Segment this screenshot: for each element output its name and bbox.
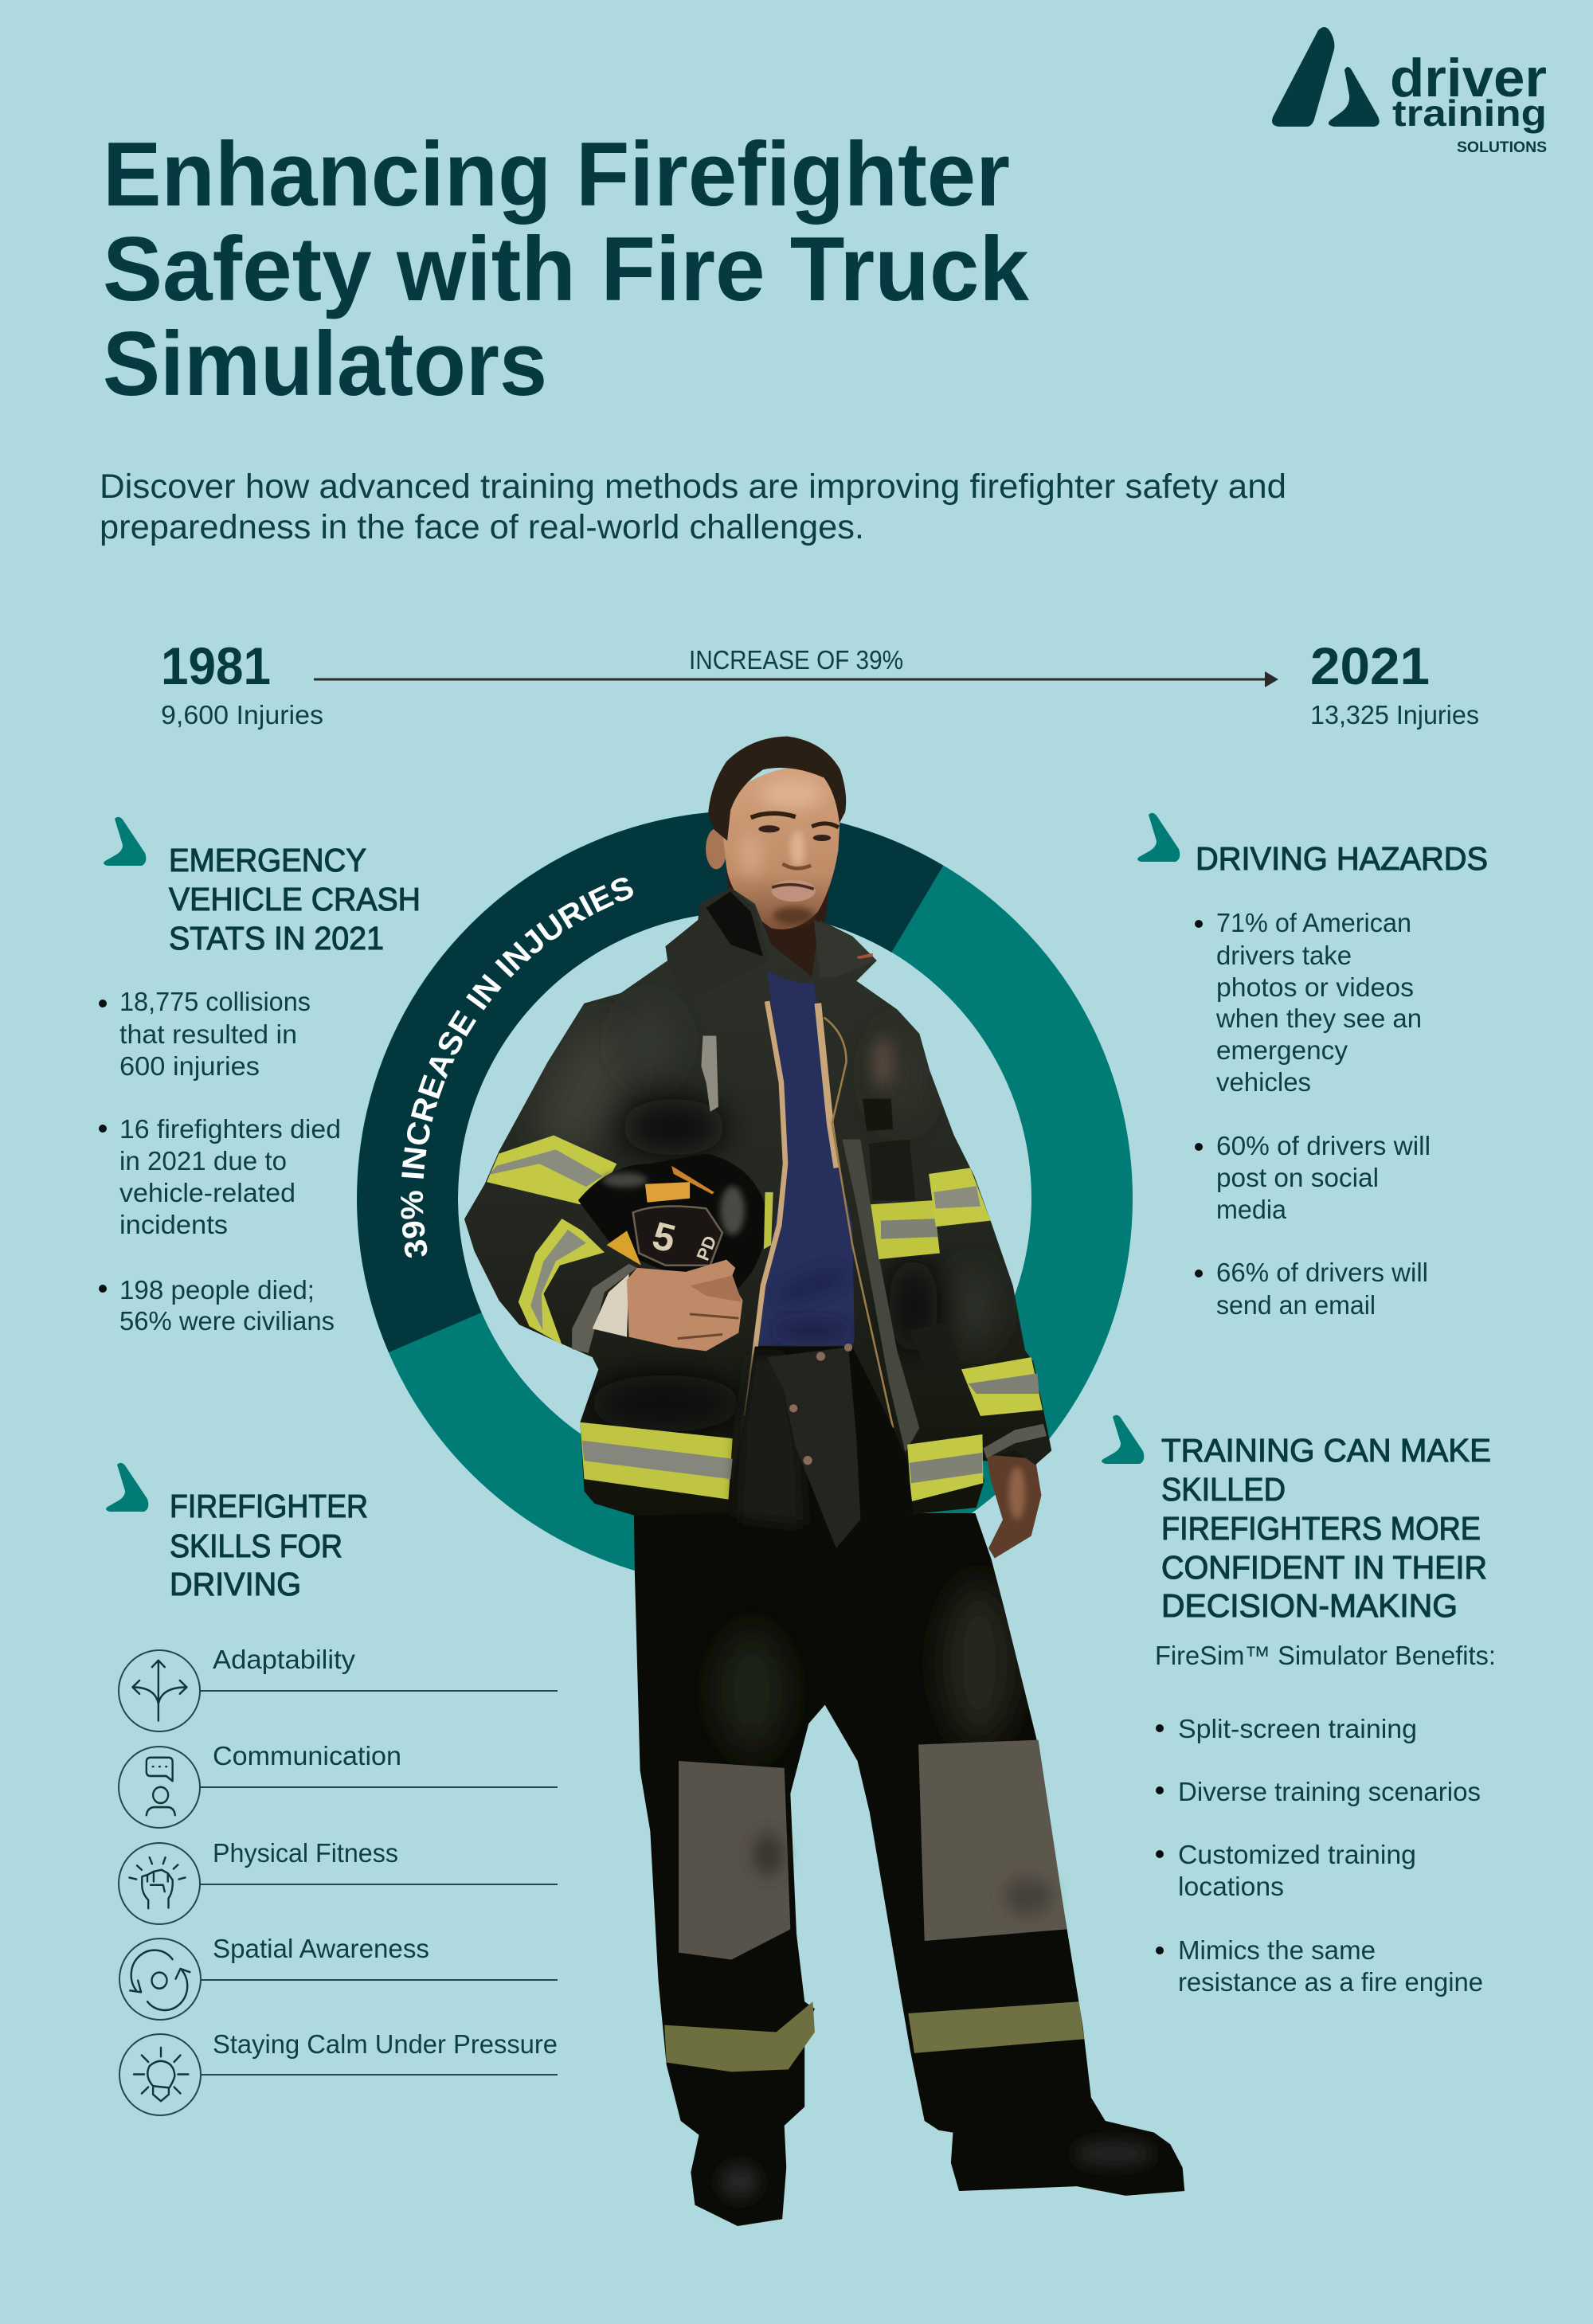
section: driving hazards: 60% of drivers will	[1216, 1131, 1431, 1160]
skill: physical fitness: Physical Fitness	[213, 1838, 398, 1868]
intro text: Discover how advanced training methods are improving firefighter safety and	[100, 468, 1286, 506]
section: emergency vehicle crash stats: 18,775 collisions	[119, 987, 311, 1016]
timeline: 1981 to 2021: INCREASE OF 39%	[689, 645, 903, 675]
section: training benefits: Diverse training scenarios	[1178, 1777, 1481, 1806]
logo: driver training solutions: SOLUTIONS	[1457, 139, 1547, 156]
section: training benefits: Mimics the same	[1178, 1935, 1376, 1965]
timeline: 1981 to 2021: 1981	[161, 636, 271, 695]
helmet: PD	[693, 1233, 721, 1263]
skill: communication	[119, 1741, 558, 1828]
skill: staying calm under pressure: Staying Calm Under Pressure	[213, 2029, 558, 2059]
section: training benefits: TRAINING CAN MAKE	[1161, 1432, 1491, 1469]
section: training benefits: FIREFIGHTERS MORE	[1161, 1510, 1481, 1547]
firefighter figure	[464, 736, 1184, 2226]
section: training benefits: FireSim™ Simulator Benefits:	[1155, 1641, 1496, 1670]
section: emergency vehicle crash stats	[99, 817, 421, 1336]
skill: adaptability	[119, 1645, 558, 1731]
section: driving hazards: drivers take	[1216, 941, 1352, 970]
section: emergency vehicle crash stats: VEHICLE CRASH	[169, 881, 421, 917]
skill: staying calm under pressure	[119, 2029, 558, 2115]
section: training benefits: Split-screen training	[1178, 1714, 1417, 1743]
section: driving hazards: photos or videos	[1216, 972, 1414, 1002]
section: emergency vehicle crash stats: vehicle-related	[119, 1178, 296, 1207]
section: training benefits: SKILLED	[1161, 1471, 1286, 1508]
section: emergency vehicle crash stats: 198 people died;	[119, 1275, 315, 1305]
section: training benefits: resistance as a fire engine	[1178, 1967, 1483, 1997]
skill: spatial awareness	[119, 1934, 558, 2020]
timeline: 1981 to 2021: 13,325 Injuries	[1310, 700, 1479, 730]
logo: driver training solutions: driver	[1390, 48, 1547, 108]
donut chart: 39% increase in injuries	[357, 812, 1114, 1568]
section: emergency vehicle crash stats: in 2021 due to	[119, 1146, 287, 1176]
section: training benefits	[1102, 1415, 1496, 1997]
section: driving hazards: 66% of drivers will	[1216, 1258, 1428, 1287]
intro text: preparedness in the face of real-world challenges.	[100, 508, 864, 546]
section: driving hazards: vehicles	[1216, 1067, 1311, 1097]
section: driving hazards: DRIVING HAZARDS	[1196, 840, 1488, 877]
section: driving hazards: send an email	[1216, 1290, 1376, 1320]
timeline: 1981 to 2021: 2021	[1310, 636, 1430, 695]
helmet: 5	[648, 1214, 679, 1261]
skill: adaptability: Adaptability	[213, 1645, 356, 1674]
section: emergency vehicle crash stats: 600 injuries	[119, 1051, 260, 1081]
section: driving hazards: emergency	[1216, 1035, 1348, 1065]
section: training benefits: DECISION-MAKING	[1161, 1587, 1458, 1624]
left hand and cuff	[572, 1260, 742, 1353]
icon: teal marker	[106, 1463, 148, 1512]
helmet	[578, 1153, 766, 1298]
icon: teal marker	[1137, 813, 1180, 862]
section: driving hazards: post on social	[1216, 1163, 1379, 1192]
section: driving hazards: media	[1216, 1195, 1287, 1224]
section: emergency vehicle crash stats: that resulted in	[119, 1019, 297, 1049]
icon: teal marker	[1102, 1415, 1144, 1464]
title: Enhancing Firefighter	[103, 124, 1010, 225]
section: firefighter skills for driving: DRIVING	[170, 1566, 301, 1602]
title: Safety with Fire Truck	[103, 219, 1030, 320]
section: emergency vehicle crash stats: 56% were civilians	[119, 1306, 335, 1336]
section: training benefits: CONFIDENT IN THEIR	[1161, 1549, 1487, 1586]
title	[103, 124, 1030, 415]
section: driving hazards	[1137, 813, 1488, 1320]
right hand and cuff	[983, 1424, 1051, 1559]
icon: teal marker	[104, 817, 146, 866]
yellow reflective stripes	[487, 1136, 1043, 1501]
skill: communication: Communication	[213, 1741, 401, 1770]
timeline: 1981 to 2021: 9,600 Injuries	[161, 700, 323, 730]
section: emergency vehicle crash stats: EMERGENCY	[169, 842, 366, 878]
section: emergency vehicle crash stats: 16 firefighters died	[119, 1114, 341, 1144]
section: training benefits: locations	[1178, 1872, 1284, 1901]
donut chart: 39% increase in injuries: 39% INCREASE IN INJURIES	[401, 878, 633, 1258]
section: firefighter skills for driving	[106, 1463, 558, 2115]
section: emergency vehicle crash stats: incidents	[119, 1210, 228, 1239]
logo: driver training solutions: training	[1392, 92, 1547, 134]
skill: spatial awareness: Spatial Awareness	[213, 1934, 429, 1963]
section: emergency vehicle crash stats: STATS IN 2021	[169, 920, 384, 957]
section: driving hazards: when they see an	[1215, 1004, 1422, 1033]
section: firefighter skills for driving: FIREFIGHTER	[170, 1488, 368, 1524]
section: driving hazards: 71% of American	[1216, 908, 1411, 937]
section: firefighter skills for driving: SKILLS FOR	[170, 1528, 342, 1564]
timeline: 1981 to 2021	[161, 636, 1479, 730]
intro text	[100, 468, 1286, 546]
skill: physical fitness	[119, 1838, 558, 1924]
title: Simulators	[103, 314, 547, 415]
section: training benefits: Customized training	[1178, 1840, 1416, 1869]
logo: driver training solutions	[1272, 27, 1547, 156]
